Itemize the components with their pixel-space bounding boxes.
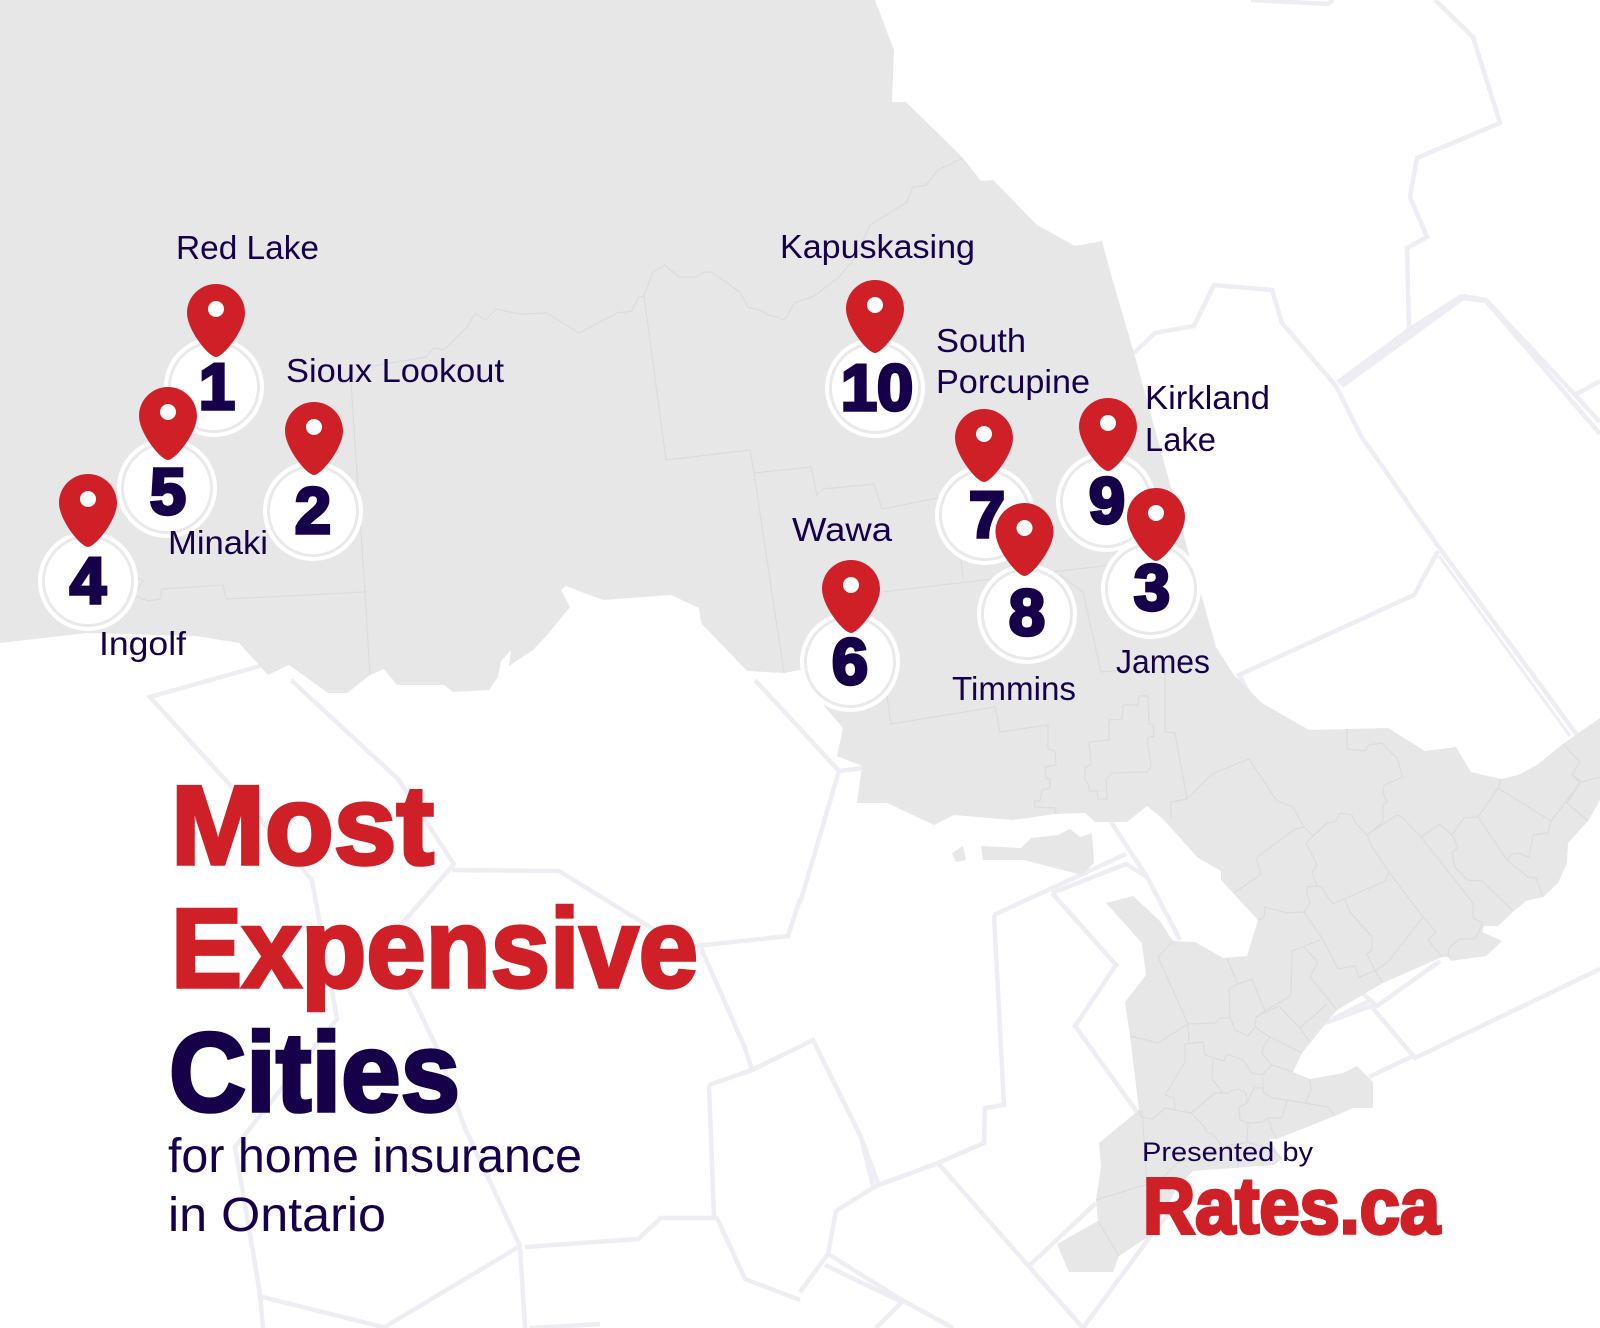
marker 5 badge bbox=[119, 440, 215, 536]
marker 5 badge: 5 bbox=[150, 455, 186, 528]
marker 2 badge bbox=[265, 463, 361, 559]
city labels: Kapuskasing bbox=[780, 228, 975, 265]
city labels bbox=[99, 228, 1270, 707]
presenter logo: Presented by bbox=[1142, 1137, 1314, 1167]
marker 8 badge: 8 bbox=[1009, 576, 1045, 649]
city labels: Kirkland bbox=[1145, 379, 1270, 416]
pin 3 bbox=[1127, 488, 1185, 561]
marker 4 badge: 4 bbox=[70, 544, 106, 617]
pin 7 bbox=[955, 409, 1013, 482]
internal region boundaries bbox=[130, 158, 1600, 1256]
marker 3 badge bbox=[1103, 541, 1199, 637]
title: Expensive bbox=[171, 886, 698, 1011]
pin 4 bbox=[59, 474, 117, 547]
city labels: Timmins bbox=[952, 670, 1076, 707]
marker 1 badge: 1 bbox=[199, 350, 235, 423]
city labels: South bbox=[936, 322, 1026, 359]
pin 5 bbox=[139, 387, 197, 460]
marker 8 badge bbox=[979, 566, 1075, 662]
marker 6 badge bbox=[802, 614, 898, 710]
marker 3 badge: 3 bbox=[1134, 551, 1170, 624]
city labels: Red Lake bbox=[176, 229, 319, 266]
marker 7 badge: 7 bbox=[969, 478, 1005, 551]
subtitle: for home insurance bbox=[168, 1130, 582, 1183]
city labels: Porcupine bbox=[936, 363, 1090, 400]
city labels: Lake bbox=[1145, 421, 1216, 458]
marker 10 badge: 10 bbox=[841, 351, 913, 424]
subtitle bbox=[168, 1130, 582, 1242]
marker 1 badge bbox=[166, 339, 262, 435]
marker 6 badge: 6 bbox=[832, 625, 868, 698]
pin 9 bbox=[1079, 398, 1137, 471]
city labels: James bbox=[1116, 643, 1210, 680]
marker 7 badge bbox=[937, 467, 1033, 563]
city labels: Minaki bbox=[168, 524, 268, 561]
pin 8 bbox=[996, 503, 1054, 576]
title: Most bbox=[171, 763, 434, 888]
pin 10 bbox=[846, 280, 904, 353]
pin 6 bbox=[822, 560, 880, 633]
presenter logo: Rates.ca bbox=[1143, 1161, 1441, 1250]
marker 9 badge: 9 bbox=[1089, 464, 1125, 537]
city labels: Sioux Lookout bbox=[286, 352, 504, 389]
pin 1 bbox=[187, 284, 245, 357]
marker 2 badge: 2 bbox=[295, 474, 331, 547]
city labels: Wawa bbox=[792, 511, 893, 548]
title: Cities bbox=[169, 1010, 460, 1135]
pin 2 bbox=[285, 402, 343, 475]
marker 10 badge bbox=[827, 340, 923, 436]
subtitle: in Ontario bbox=[168, 1189, 386, 1242]
title bbox=[169, 763, 698, 1135]
city labels: Ingolf bbox=[99, 625, 187, 662]
marker 4 badge bbox=[40, 533, 136, 629]
marker 9 badge bbox=[1058, 454, 1154, 550]
